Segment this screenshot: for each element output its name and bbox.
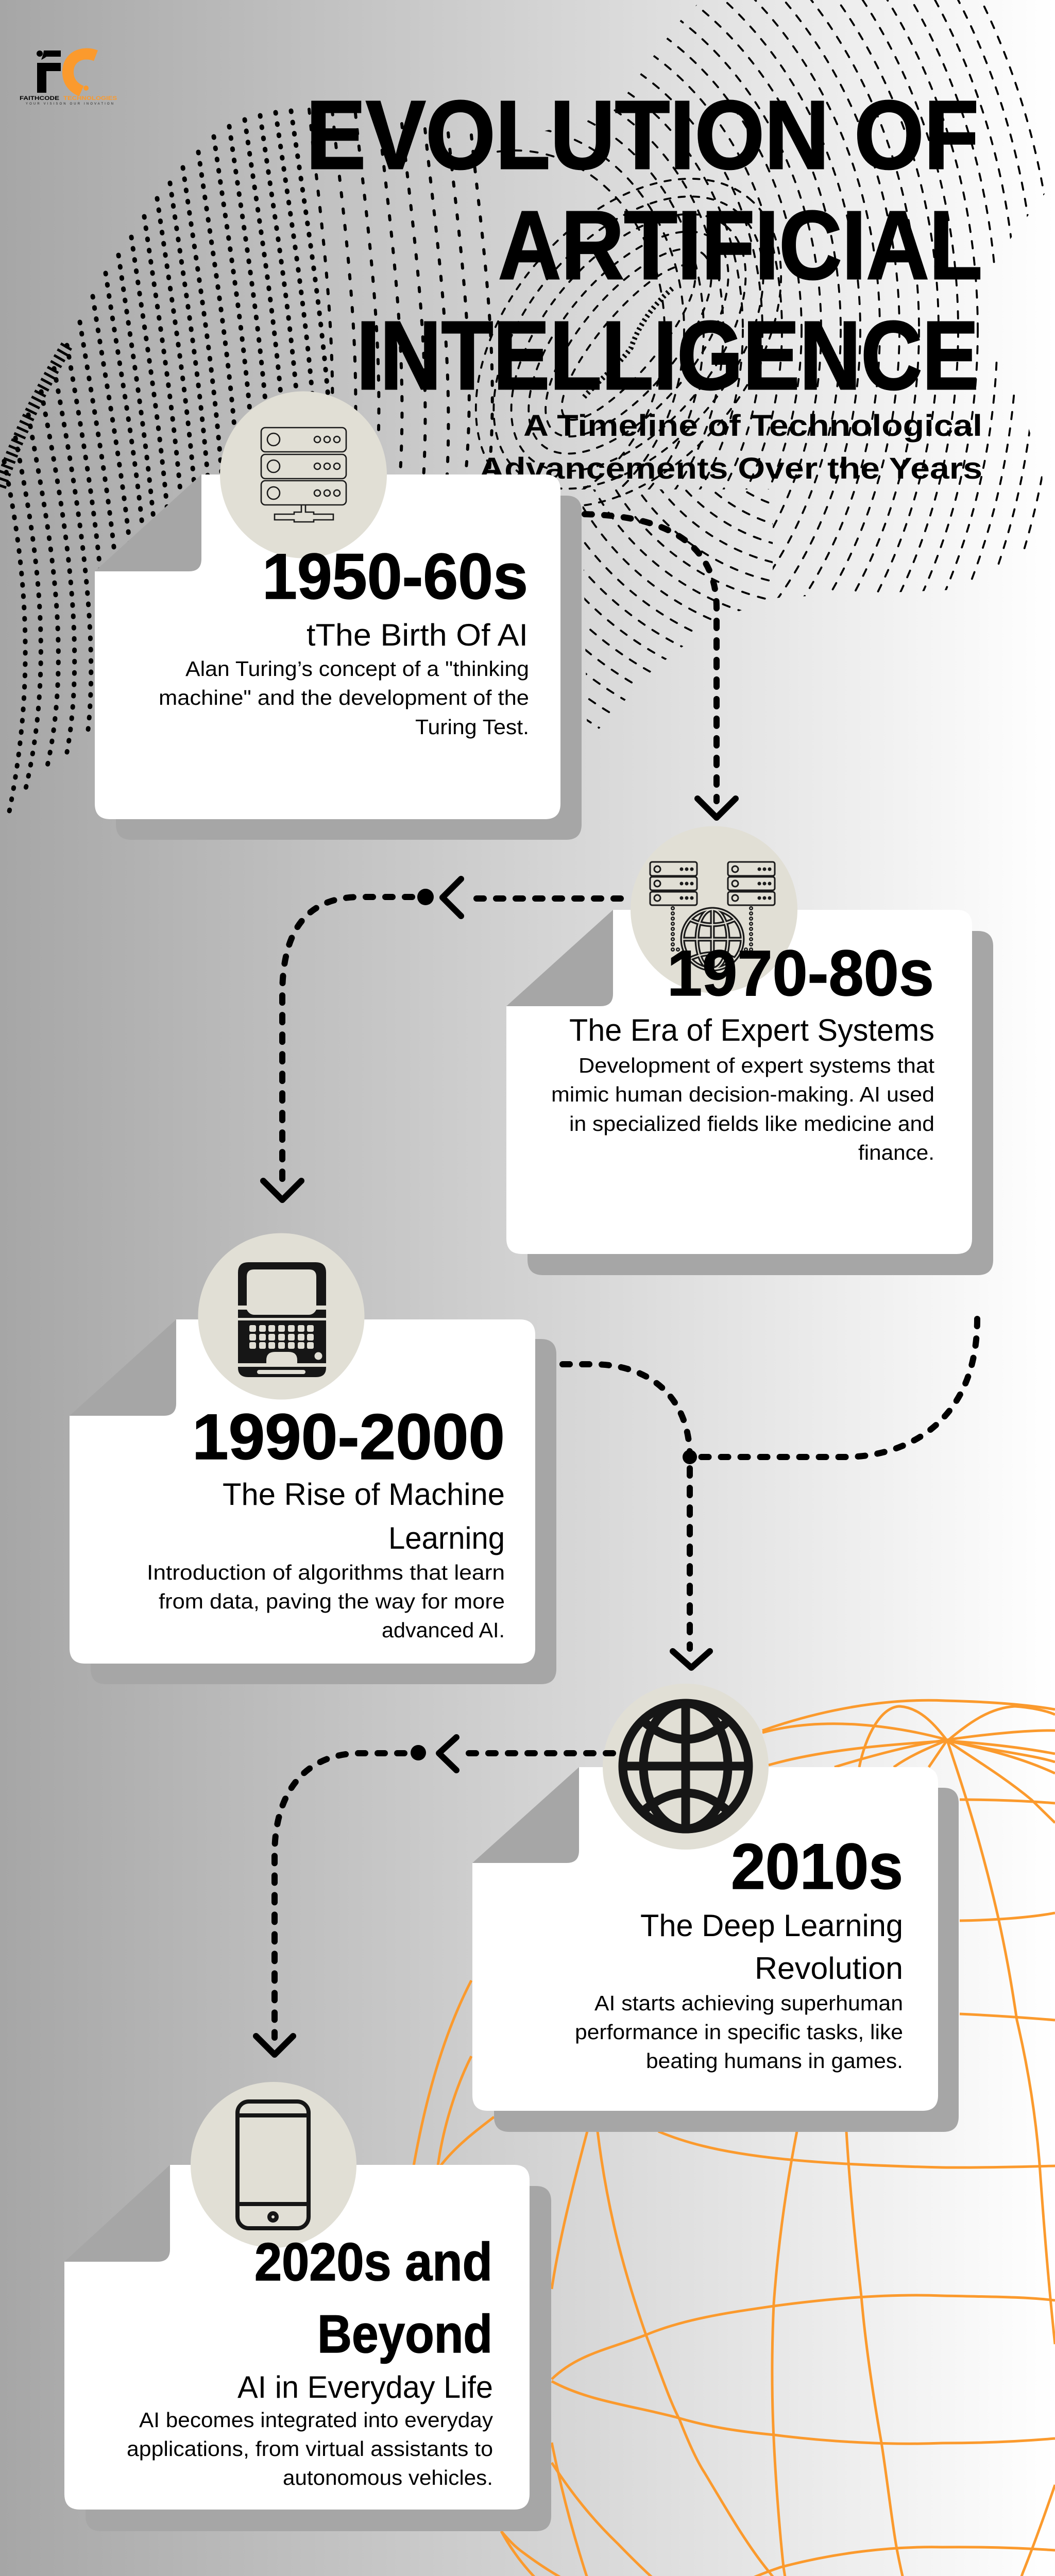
description: autonomous vehicles. bbox=[283, 2466, 493, 2489]
logo mark: F bbox=[37, 50, 61, 93]
description: Turing Test. bbox=[415, 715, 529, 739]
year: Beyond bbox=[317, 2304, 492, 2364]
title: INTELLIGENCE bbox=[356, 301, 979, 410]
arrow: 1990s to 2010s with branch bbox=[563, 1319, 977, 1668]
logo mark: orange dot bbox=[83, 86, 89, 91]
heading: Learning bbox=[388, 1521, 505, 1555]
year bbox=[254, 2232, 492, 2364]
heading bbox=[640, 1908, 903, 1986]
year: 2020s and bbox=[254, 2232, 492, 2292]
description: applications, from virtual assistants to bbox=[127, 2437, 493, 2461]
panel: 2010s bbox=[472, 1684, 959, 2132]
description: finance. bbox=[858, 1141, 934, 1164]
description: mimic human decision-making. AI used bbox=[551, 1082, 934, 1106]
logo tagline: YOUR VISISON OUR INOVATION bbox=[26, 103, 113, 106]
panel: 2020s and Beyond bbox=[64, 2082, 551, 2531]
icon circle bbox=[603, 1684, 769, 1850]
logo wordmark: FAITHCODE bbox=[20, 95, 59, 101]
card shadow bbox=[494, 1788, 959, 2132]
heading: Revolution bbox=[755, 1951, 903, 1986]
panel: 1970-80s bbox=[506, 826, 993, 1275]
halftone wave pattern bbox=[0, 0, 1055, 979]
card shadow bbox=[116, 496, 582, 840]
icon: laptop bbox=[238, 1262, 326, 1377]
description: from data, paving the way for more bbox=[159, 1589, 505, 1613]
icon: smartphone bbox=[237, 2102, 309, 2228]
card shadow bbox=[86, 2186, 551, 2531]
heading: The Rise of Machine bbox=[223, 1477, 505, 1512]
heading: The Deep Learning bbox=[640, 1908, 903, 1943]
folded corner bbox=[472, 1767, 579, 1863]
folded corner bbox=[64, 2165, 170, 2262]
subtitle: A Timeline of Technological bbox=[523, 409, 982, 443]
description: advanced AI. bbox=[382, 1618, 505, 1642]
icon circle bbox=[191, 2082, 356, 2248]
description: beating humans in games. bbox=[646, 2049, 903, 2073]
title bbox=[306, 81, 982, 410]
year: 1990-2000 bbox=[192, 1401, 505, 1473]
icon circle bbox=[631, 826, 797, 993]
description: Development of expert systems that bbox=[578, 1054, 935, 1077]
card shadow bbox=[91, 1339, 556, 1684]
description: AI starts achieving superhuman bbox=[594, 1991, 903, 2015]
logo bbox=[20, 50, 117, 106]
card bbox=[64, 2165, 530, 2510]
year: 2010s bbox=[731, 1831, 903, 1903]
icon circle bbox=[198, 1233, 365, 1399]
description: Introduction of algorithms that learn bbox=[147, 1561, 505, 1584]
description: in specialized fields like medicine and bbox=[569, 1112, 934, 1136]
folded corner bbox=[95, 474, 201, 571]
description: AI becomes integrated into everyday bbox=[139, 2408, 494, 2432]
heading: The Era of Expert Systems bbox=[569, 1013, 934, 1047]
arrow: 1970s to 1990s bbox=[263, 879, 621, 1200]
title: EVOLUTION OF bbox=[306, 81, 979, 190]
logo wordmark orange: TECHNOLOGIES bbox=[63, 95, 117, 101]
card shadow bbox=[528, 931, 993, 1275]
description bbox=[147, 1561, 505, 1642]
orange wire globe bbox=[414, 1700, 1055, 2576]
description: machine" and the development of the bbox=[159, 686, 529, 709]
card bbox=[472, 1767, 938, 2111]
year: 1970-80s bbox=[667, 938, 934, 1009]
heading bbox=[223, 1477, 505, 1555]
panel: 1990-2000 bbox=[70, 1233, 556, 1684]
heading: AI in Everyday Life bbox=[237, 2370, 493, 2404]
folded corner bbox=[70, 1319, 176, 1416]
logo dot bbox=[37, 50, 43, 57]
logo mark: C bbox=[68, 54, 96, 91]
title: ARTIFICIAL bbox=[498, 191, 982, 300]
description: Alan Turing’s concept of a "thinking bbox=[185, 657, 529, 681]
description bbox=[159, 657, 529, 739]
description bbox=[127, 2408, 494, 2489]
icon: server stack bbox=[261, 428, 346, 522]
subtitle bbox=[479, 409, 982, 485]
icon: servers and globe bbox=[650, 862, 775, 969]
heading: tThe Birth Of AI bbox=[307, 618, 528, 652]
folded corner bbox=[506, 910, 613, 1006]
description bbox=[575, 1991, 903, 2073]
card bbox=[506, 910, 972, 1254]
panel: 1950-60s bbox=[95, 392, 582, 840]
icon: globe bbox=[623, 1703, 748, 1829]
icon circle bbox=[220, 392, 387, 558]
card bbox=[70, 1319, 535, 1664]
arrow: 2010s to 2020s bbox=[256, 1737, 613, 2055]
description bbox=[551, 1054, 935, 1164]
description: performance in specific tasks, like bbox=[575, 2020, 903, 2044]
subtitle: Advancements Over the Years bbox=[479, 452, 982, 485]
year: 1950-60s bbox=[262, 541, 528, 613]
card bbox=[95, 474, 560, 819]
arrow: 1950s to 1970s bbox=[585, 514, 736, 818]
